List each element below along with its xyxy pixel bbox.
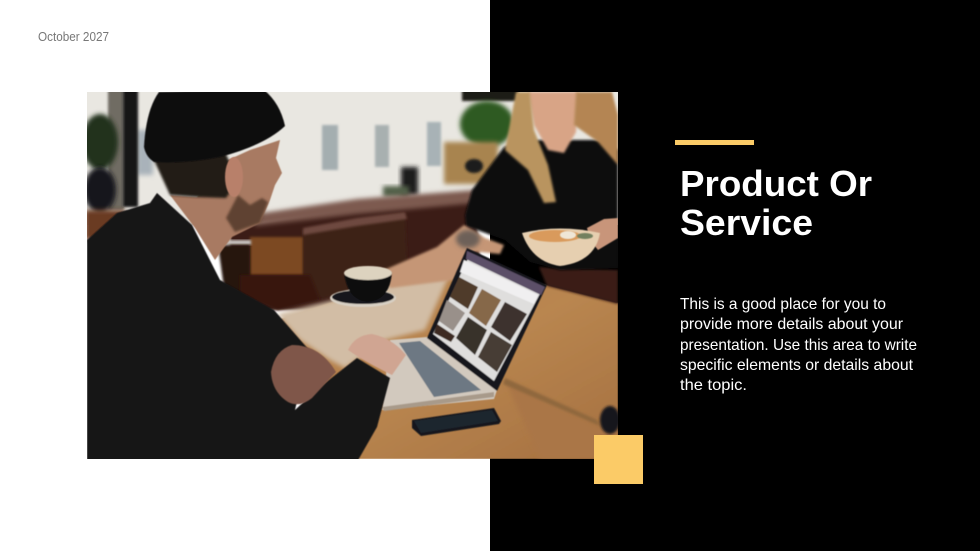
yellow accent bar [675,140,754,145]
laptop screen gallery tiles [450,277,478,309]
dark object at photo edge [600,406,620,434]
body text [680,296,917,394]
body text: the topic. [680,377,747,394]
man beanie [144,90,285,162]
title: Service [680,202,813,243]
black right panel [490,0,980,551]
body text: specific elements or details about [680,357,914,374]
man near hand [271,345,336,404]
body text: presentation. Use this area to write [680,337,917,354]
coffee cup and saucer [330,266,396,307]
laptop [382,248,547,411]
body text: provide more details about your [680,316,904,333]
title: Product Or [680,163,872,204]
cafe background [80,85,625,310]
chairs [218,212,407,310]
title [680,163,872,243]
date label: October 2027 [38,30,109,44]
yellow accent square [594,435,643,484]
man far hand [348,334,406,375]
body text: This is a good place for you to [680,296,886,313]
salad bowl and hand [587,218,618,250]
man neck and face [170,140,282,260]
man jacket [87,193,390,462]
wood table [277,272,618,459]
man [87,90,406,462]
photo: man and woman at a cafe table with a laptop [80,85,625,462]
phone [412,408,501,436]
woman [384,92,618,304]
